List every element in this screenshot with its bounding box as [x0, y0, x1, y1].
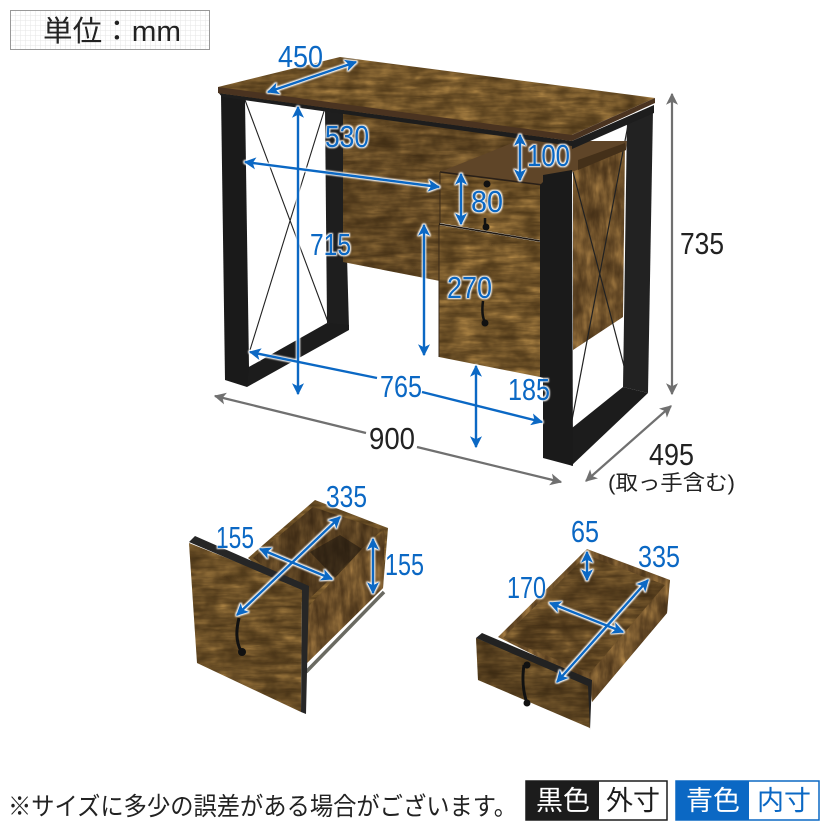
front-left leg: [221, 95, 249, 387]
cabinet shelf opening: [440, 141, 627, 185]
dimension 100: 100: [527, 138, 570, 173]
desk illustration: [218, 57, 655, 466]
large drawer illustration: [189, 500, 388, 714]
dimension small drawer height 65: [571, 514, 599, 580]
small drawer handle: [523, 662, 530, 706]
dimension small drawer depth 335: 335: [638, 539, 680, 574]
left X brace: [245, 100, 328, 350]
dimension 450: 450: [278, 39, 323, 74]
legend: black = outer dimensions: 黒色: [536, 786, 590, 816]
dimension 530: [245, 119, 439, 187]
dimension 715: 715: [310, 227, 351, 262]
drawer one front: [440, 172, 543, 240]
right rail: [571, 387, 648, 466]
dimension 185: [476, 366, 550, 447]
dimension 495: [586, 406, 735, 495]
dimension large drawer height 155: 155: [385, 547, 424, 582]
legend: blue = inner dimensions: 青色: [686, 786, 740, 816]
dimension 765: [250, 352, 542, 422]
dimension 495: (取っ手含む): [608, 472, 735, 495]
dimension 270: [424, 225, 492, 355]
dimension 80: 80: [471, 184, 503, 219]
outer dimensions (gray/black): [215, 94, 735, 495]
dimension 80: [461, 174, 503, 224]
dimension small drawer height 65: 65: [571, 514, 599, 549]
dimension 270: 270: [447, 270, 492, 305]
small drawer black edge: [476, 633, 592, 730]
dimension 735: 735: [680, 226, 724, 261]
drawer two front: [439, 225, 540, 377]
dimension small drawer width 170: [507, 570, 623, 632]
dimension small drawer width 170: 170: [507, 570, 546, 605]
dimension 100: [520, 135, 570, 180]
dimension 450: [268, 39, 356, 92]
drawer side: [307, 530, 385, 663]
drawer interior: [253, 507, 382, 600]
small drawer interior: [503, 555, 665, 673]
dimension large drawer depth 335: [237, 479, 367, 615]
dimension large drawer width 155: [216, 520, 332, 579]
dimension 495: 495: [649, 437, 694, 472]
dimension 900: [215, 396, 561, 482]
legend: black = outer dimensions: 外寸: [606, 786, 660, 816]
back-right leg: [623, 110, 653, 393]
small drawer box: [498, 549, 670, 702]
dimension 765: 765: [380, 369, 422, 404]
drawer handle: [237, 618, 246, 656]
legend: black = outer dimensions: [526, 781, 667, 820]
modesty panel: [343, 112, 560, 281]
dimension 530: 530: [325, 119, 369, 154]
drawer front panel: [189, 543, 302, 712]
dimension small drawer depth 335: [557, 539, 680, 682]
right X brace: [572, 125, 628, 420]
drawer rail: [306, 592, 384, 672]
desktop: [218, 57, 655, 141]
small drawer illustration: [476, 549, 670, 730]
inner dimensions (blue): [216, 39, 680, 682]
dimension 900: 900: [369, 421, 415, 456]
right side panel: [573, 145, 625, 350]
dimension large drawer depth 335: 335: [326, 479, 367, 514]
dimension large drawer width 155: 155: [216, 520, 254, 555]
unit label: 単位 mm: [10, 10, 210, 50]
small drawer side: [590, 580, 670, 702]
under-top black band: [572, 105, 654, 149]
drawer handles: [482, 180, 490, 326]
drawer front black edge: [189, 536, 309, 714]
legend: blue = inner dimensions: 内寸: [757, 786, 811, 816]
drawer box outer: [248, 500, 388, 663]
footnote: ※サイズに多少の誤差がある場合がございます。: [8, 792, 517, 821]
dimension 185: 185: [508, 372, 550, 407]
legend: blue = inner dimensions: [676, 781, 819, 820]
front-right leg: [543, 170, 573, 466]
left rail: [247, 323, 349, 387]
small drawer front: [476, 638, 590, 728]
back-left leg: [325, 108, 349, 328]
unit label: 単位 mm: 単位：mm: [43, 15, 181, 48]
dimension large drawer height 155: [373, 539, 424, 593]
